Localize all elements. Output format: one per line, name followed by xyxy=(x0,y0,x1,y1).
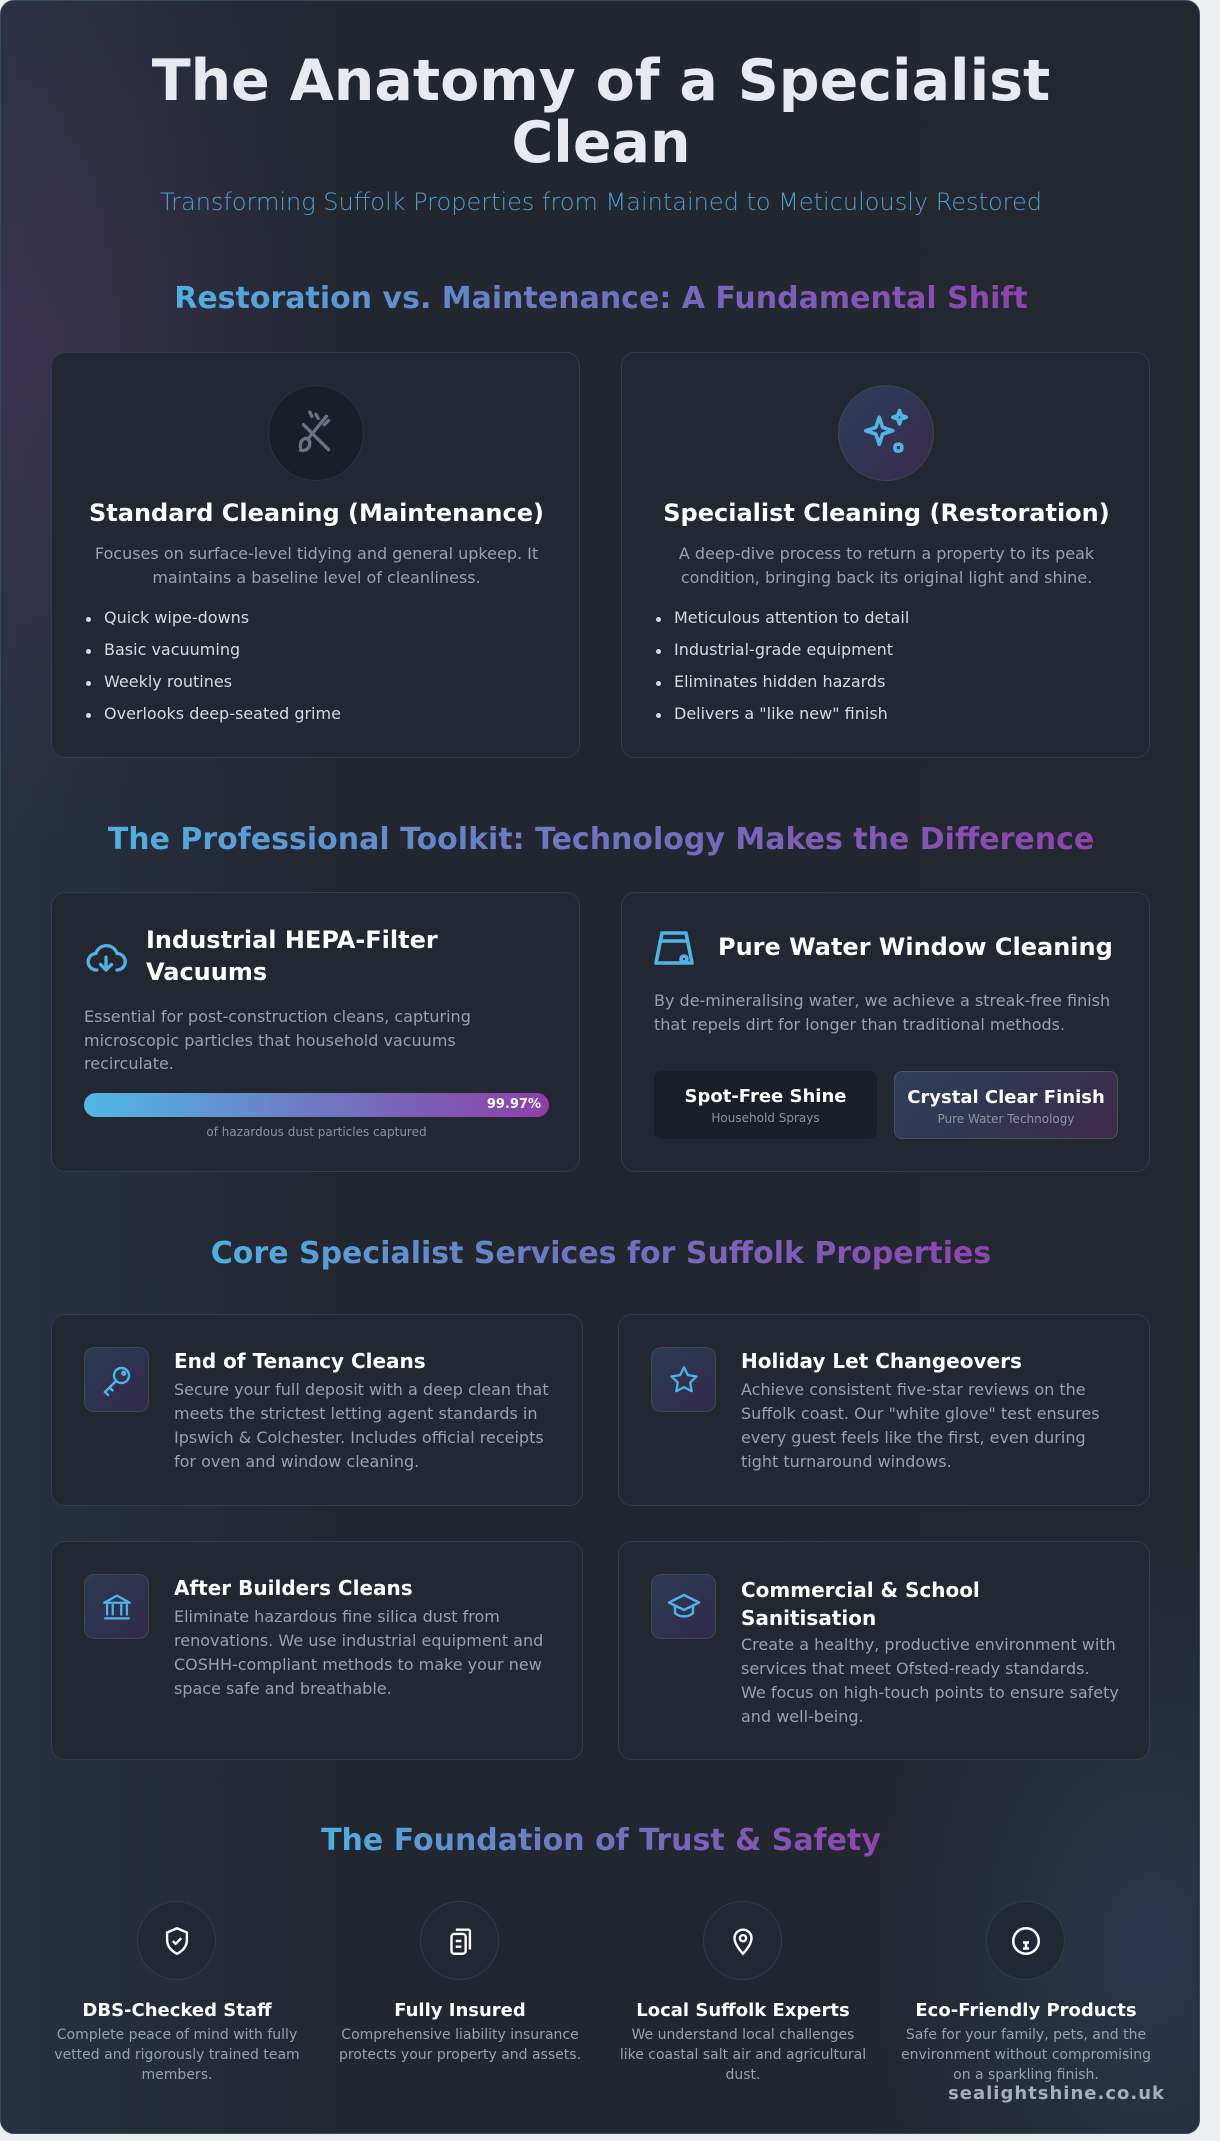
heading: restoration vs maintenance: Restoration vs. Maintenance: A Fundamental Shift xyxy=(174,281,1028,316)
icon: shield xyxy=(137,1901,216,1980)
trust item: eco: Eco-Friendly Products xyxy=(915,2000,1137,2021)
service description: Achieve consistent five-star reviews on the Suffolk coast. Our "white glove" test ensures every guest feels like the first, even during tight turnaround windows. xyxy=(741,1380,1100,1471)
icon: sparkles xyxy=(838,385,934,481)
trust item: DBS: vetted and rigorously trained team xyxy=(54,2047,300,2063)
comparison: crystal clear finish: Crystal Clear Finish xyxy=(907,1087,1105,1108)
heading: toolkit: The Professional Toolkit: Technology Makes the Difference xyxy=(108,822,1094,857)
icon: building xyxy=(84,1574,149,1639)
tool description: By de-mineralising water, we achieve a streak-free finish that repels dirt for longer than traditional methods. xyxy=(654,991,1110,1034)
heading: core services: Core Specialist Services for Suffolk Properties xyxy=(211,1236,991,1271)
trust item: insured: Comprehensive liability insurance xyxy=(341,2027,579,2043)
trust item: eco: Safe for your family, pets, and the xyxy=(906,2027,1146,2043)
icon: eco bottle xyxy=(986,1901,1065,1980)
service: commercial xyxy=(618,1541,1150,1760)
bullet list: Weekly routines xyxy=(104,672,232,691)
comparison: spot-free shine: Household Sprays xyxy=(711,1111,820,1125)
service description: We focus on high-touch points to ensure safety xyxy=(741,1683,1119,1702)
trust item: DBS xyxy=(54,1901,300,2083)
title: Clean xyxy=(511,110,691,176)
service description: Create a healthy, productive environment with xyxy=(741,1635,1116,1654)
trust item: local xyxy=(620,1901,866,2083)
panel: pure water xyxy=(621,892,1150,1172)
trust item: local: We understand local challenges xyxy=(632,2027,854,2043)
bullet list: Eliminates hidden hazards xyxy=(674,672,885,691)
icon: cloud download xyxy=(86,944,127,972)
bullet list: Quick wipe-downs xyxy=(104,608,249,627)
trust item: local: Local Suffolk Experts xyxy=(636,2000,850,2021)
icon: water fed cart xyxy=(654,931,694,965)
icon: star xyxy=(651,1347,716,1412)
icon: brush xyxy=(268,385,364,481)
service description: Secure your full deposit with a deep clean that meets the strictest letting agent standards in Ipswich & Colchester. Includes official receipts for oven and window cleaning. xyxy=(174,1380,549,1471)
card title: Specialist Cleaning (Restoration) xyxy=(663,499,1110,527)
bullet list: Delivers a "like new" finish xyxy=(674,704,888,723)
trust item: eco: environment without compromising xyxy=(901,2047,1151,2063)
card title: Standard Cleaning (Maintenance) xyxy=(89,499,544,527)
panel: standard cleaning xyxy=(51,352,580,758)
trust item: insured xyxy=(339,1901,581,2063)
progress bar 99.97%: 99.97% xyxy=(487,1097,541,1112)
panel: HEPA vacuums xyxy=(51,892,580,1172)
subtitle: Transforming Suffolk Properties from Maintained to Meticulously Restored xyxy=(160,188,1042,216)
icon: map pin xyxy=(703,1901,782,1980)
card description: Focuses on surface-level tidying and general upkeep. It maintains a baseline level of cleanliness. xyxy=(95,544,538,586)
service: end of tenancy xyxy=(51,1314,583,1506)
comparison: crystal clear finish: Pure Water Technology xyxy=(937,1112,1074,1126)
trust item: local: dust. xyxy=(726,2067,760,2083)
tool title: Industrial HEPA-Filter Vacuums xyxy=(146,926,438,986)
bullet list: Basic vacuuming xyxy=(104,640,240,659)
bar caption: of hazardous dust particles captured xyxy=(206,1125,427,1139)
bullet list: Meticulous attention to detail xyxy=(674,608,909,627)
bullet list xyxy=(656,608,909,723)
service description: Eliminate hazardous fine silica dust from renovations. We use industrial equipment and COSHH-compliant methods to make your new space safe and breathable. xyxy=(174,1607,543,1698)
service description: and well-being. xyxy=(741,1707,864,1726)
panel: specialist cleaning xyxy=(621,352,1150,758)
bullet list: Industrial-grade equipment xyxy=(674,640,893,659)
tool description: Essential for post-construction cleans, capturing microscopic particles that household vacuums recirculate. xyxy=(84,1007,471,1073)
service: after builders xyxy=(51,1541,583,1760)
title xyxy=(152,48,1050,176)
trust item: DBS: DBS-Checked Staff xyxy=(82,2000,272,2021)
heading: trust & safety: The Foundation of Trust & Safety xyxy=(321,1823,881,1858)
tool title: Pure Water Window Cleaning xyxy=(718,933,1113,961)
icon: clipboard xyxy=(420,1901,499,1980)
service title: Commercial & School Sanitisation xyxy=(741,1578,980,1630)
comparison: spot-free shine: Spot-Free Shine xyxy=(685,1086,846,1107)
trust item: eco xyxy=(901,1901,1151,2083)
comparison: spot-free shine xyxy=(654,1071,877,1139)
service title: Holiday Let Changeovers xyxy=(741,1349,1022,1373)
comparison: crystal clear finish xyxy=(894,1071,1118,1139)
service title: End of Tenancy Cleans xyxy=(174,1349,426,1373)
trust item: eco: on a sparkling finish. xyxy=(953,2067,1099,2083)
trust item: DBS: Complete peace of mind with fully xyxy=(57,2027,297,2043)
bullet list: Overlooks deep-seated grime xyxy=(104,704,341,723)
service description: services that meet Ofsted-ready standards. xyxy=(741,1659,1090,1678)
bullet list xyxy=(86,608,341,723)
icon: key xyxy=(84,1347,149,1412)
card description: A deep-dive process to return a property to its peak condition, bringing back its original light and shine. xyxy=(679,544,1094,586)
trust item: DBS: members. xyxy=(142,2067,212,2083)
service title: After Builders Cleans xyxy=(174,1576,413,1600)
service: holiday let xyxy=(618,1314,1150,1506)
service description xyxy=(741,1635,1119,1726)
title: The Anatomy of a Specialist xyxy=(152,48,1050,114)
icon: graduation cap xyxy=(651,1574,716,1639)
progress bar 99.97% xyxy=(84,1093,549,1117)
trust item: insured: Fully Insured xyxy=(394,2000,526,2021)
trust item: insured: protects your property and assets. xyxy=(339,2047,581,2063)
footer: website: sealightshine.co.uk xyxy=(948,2083,1165,2104)
trust item: local: like coastal salt air and agricultural xyxy=(620,2047,866,2063)
